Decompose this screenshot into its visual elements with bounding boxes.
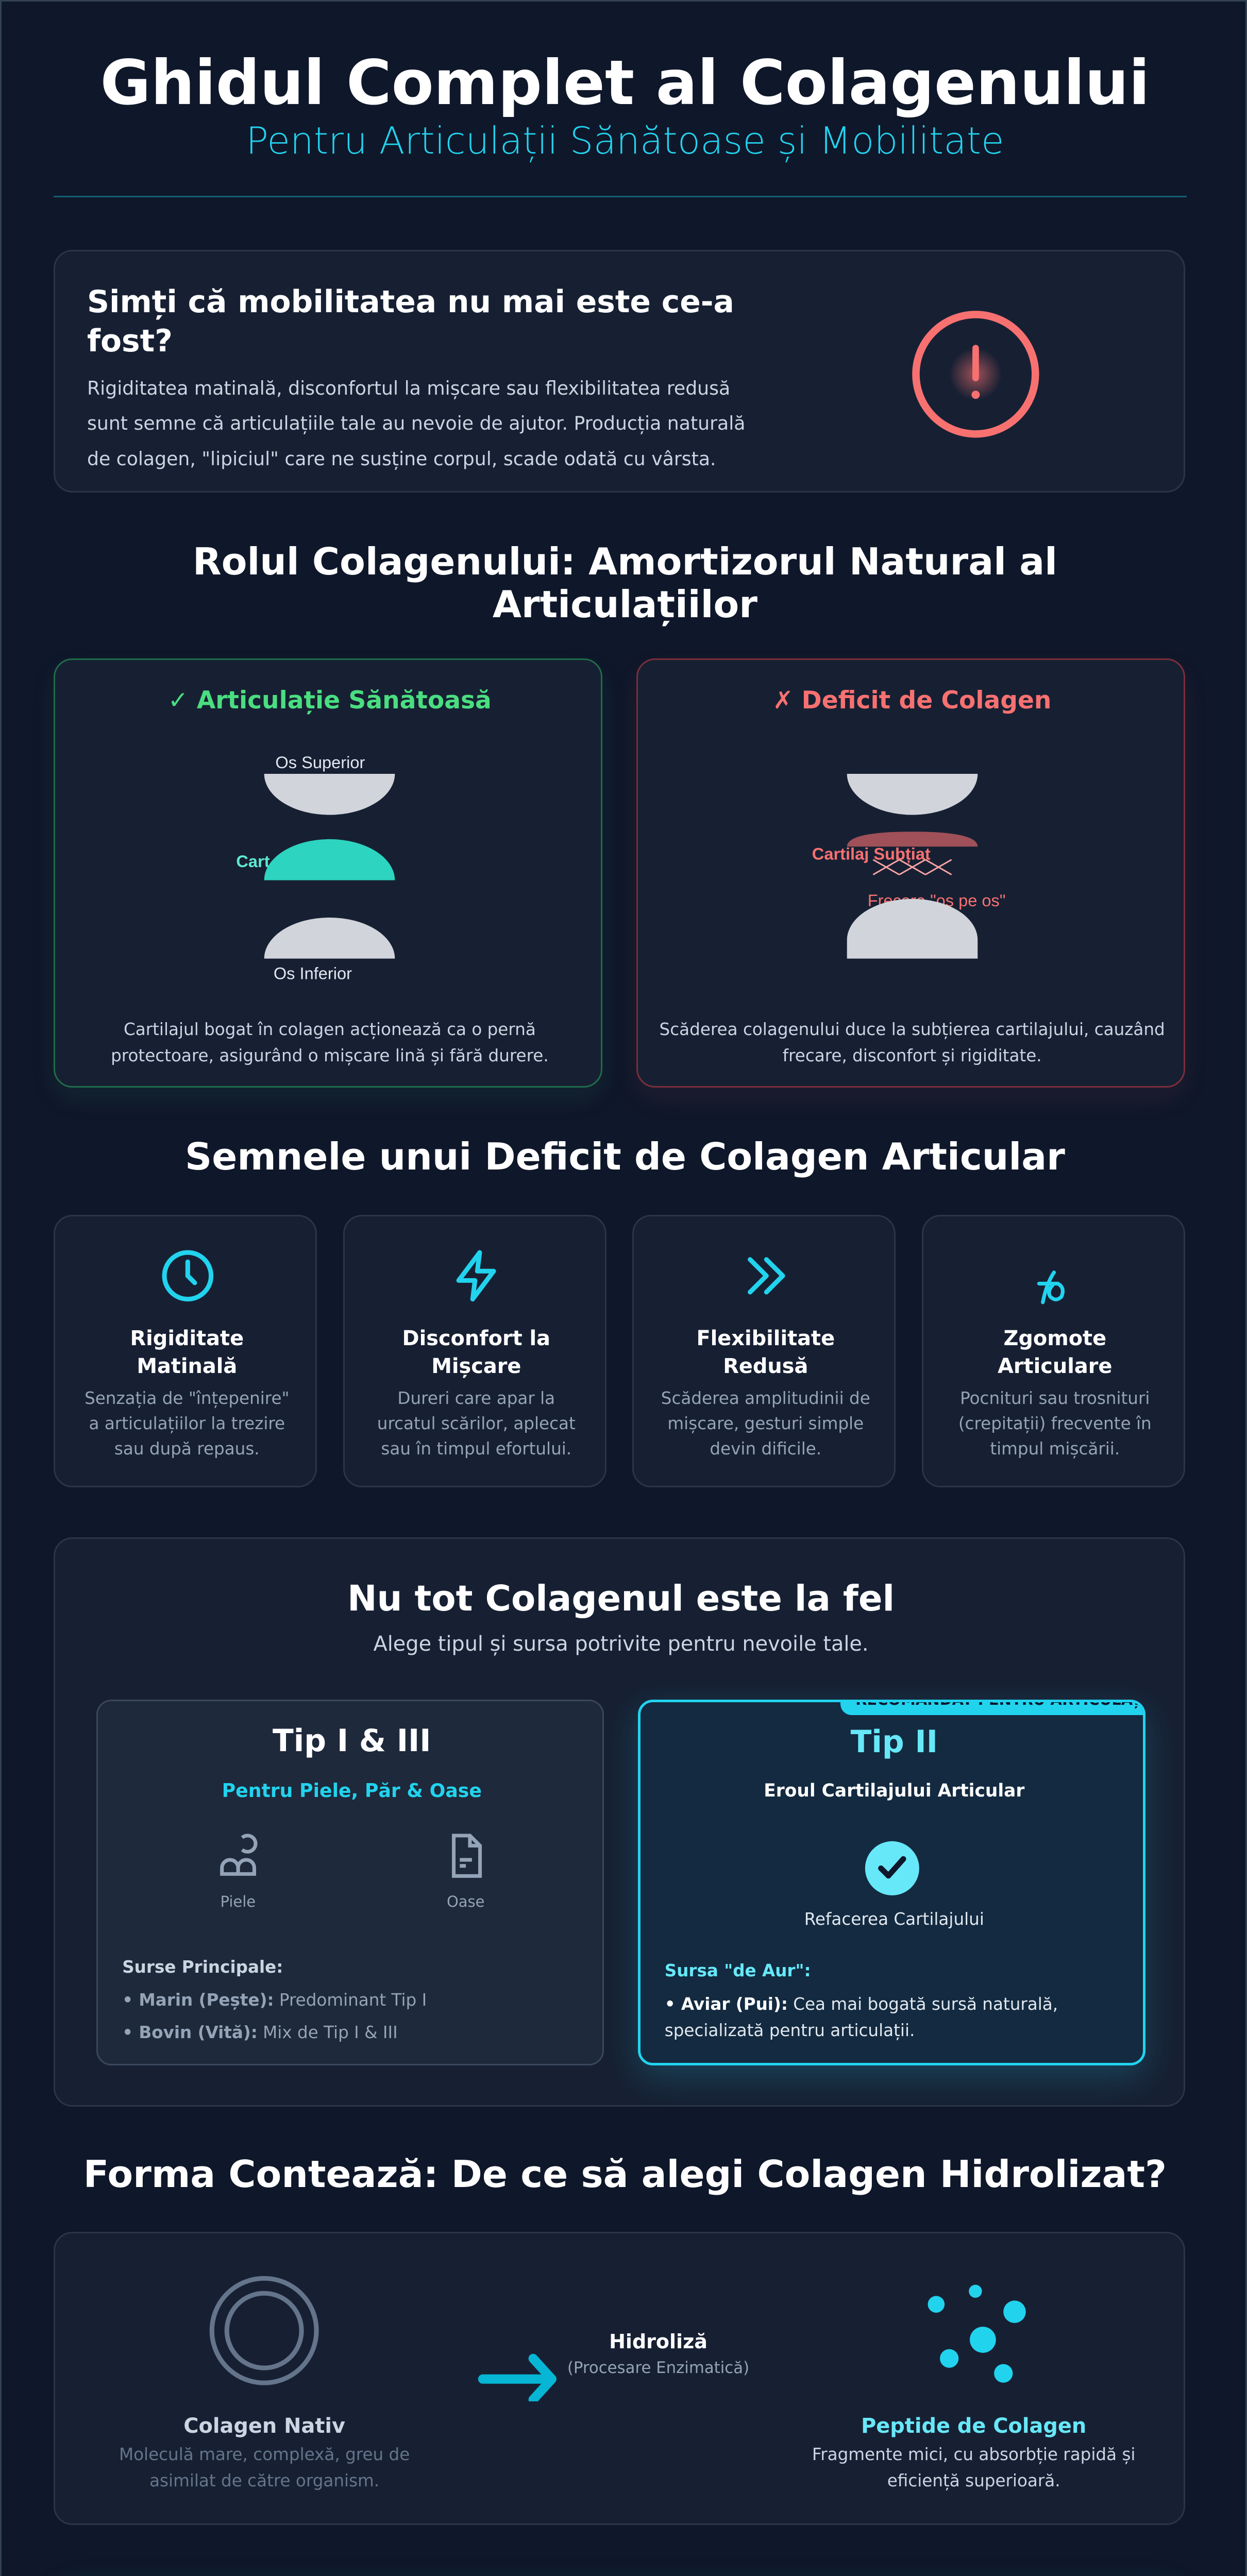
sign 3 text: Scăderea amplitudinii de mișcare, gesturi simple devin dificile. — [661, 1388, 870, 1459]
arrow — [478, 2353, 557, 2401]
peptide text: Fragmente mici, cu absorbție rapidă și eficiență superioară. — [812, 2445, 1135, 2490]
subtitle: Pentru Articulații Sănătoase și Mobilitate — [246, 120, 1004, 163]
healthy title: ✓ Articulație Sănătoasă — [168, 686, 492, 715]
diagram: healthy: Os Inferior — [274, 964, 352, 983]
types subtitle: Alege tipul și sursa potrivite pentru nevoile tale. — [373, 1632, 869, 1656]
healthy text: Cartilajul bogat în colagen acționează ca o pernă protectoare, asigurând o mișcare lină și fără durere. — [111, 1020, 549, 1065]
diagram: deficit: Cartilaj Subțiat — [812, 844, 931, 864]
diagram: healthy — [237, 753, 395, 983]
native text: Colagen Nativ — [183, 2414, 345, 2438]
icon: bolt — [457, 1250, 496, 1301]
icon: skin: Piele — [221, 1893, 256, 1910]
tip I sources: • Bovin (Vită): Mix de Tip I & III — [122, 2023, 398, 2042]
tip I sources: Surse Principale: — [122, 1957, 283, 1977]
diagram: deficit: Frecare "os pe os" — [867, 891, 1005, 910]
sign 4 text — [958, 1327, 1152, 1459]
icon: clock — [162, 1250, 213, 1301]
panel: hydrolysis — [54, 2232, 1185, 2525]
sign 4 text: Zgomote — [1003, 1327, 1106, 1350]
diagram: deficit — [812, 774, 1005, 959]
intro heading: Simți că mobilitatea nu mai este ce-a fost? — [87, 284, 734, 359]
panel: sign 4 — [922, 1215, 1185, 1487]
peptide text: Peptide de Colagen — [861, 2414, 1086, 2438]
icon: peptides — [928, 2284, 1026, 2383]
intro text: Rigiditatea matinală, disconfortul la mișcare sau flexibilitatea redusă sunt semne că articulațiile tale au nevoie de ajutor. Producția naturală de colagen, "lipiciul" care ne susține corpul, scade odată cu vârsta. — [87, 377, 745, 470]
panel: intro — [54, 250, 1185, 493]
panel: types — [54, 1537, 1185, 2107]
diagram: healthy: Cart — [237, 852, 270, 871]
icon: bone doc — [447, 1834, 484, 1910]
sign 1 text: Rigiditate — [130, 1327, 244, 1350]
sign 3 text — [661, 1327, 870, 1459]
tip II label: Refacerea Cartilajului — [804, 1909, 984, 1929]
hydrolysis label: (Procesare Enzimatică) — [567, 2359, 749, 2377]
sign 2 text: Mișcare — [431, 1354, 521, 1378]
card: tip I & III — [96, 1700, 604, 2065]
tip II source — [665, 1961, 1058, 2040]
badge — [840, 1702, 1143, 1715]
sign 4 text: Articulare — [998, 1354, 1112, 1378]
icon: chevrons — [748, 1257, 785, 1294]
icon: skin — [220, 1834, 258, 1910]
tip II source: • Aviar (Pui): Cea mai bogată sursă naturală, specializată pentru articulații. — [665, 1994, 1058, 2040]
native text — [119, 2414, 410, 2490]
deficit title: ✗ Deficit de Colagen — [773, 686, 1051, 715]
sign 1 text: Matinală — [137, 1354, 237, 1378]
heading: semnele: Semnele unui Deficit de Colagen Articular — [185, 1136, 1065, 1179]
panel: deficit — [636, 658, 1185, 1088]
panel: sign 3 — [632, 1215, 896, 1487]
panel: sign 1 — [54, 1215, 317, 1487]
icon: noise — [1037, 1270, 1065, 1304]
heading: rolul — [193, 540, 1057, 626]
sign 1 text — [85, 1327, 290, 1459]
tip I sources — [122, 1957, 427, 2042]
tip II source: Sursa "de Aur": — [665, 1961, 811, 1980]
hydrolysis label: Hidroliză — [609, 2330, 707, 2353]
peptide text — [812, 2414, 1135, 2490]
icon: alert — [912, 311, 1039, 438]
sign 2 text: Disconfort la — [402, 1327, 550, 1350]
hydrolysis label — [567, 2330, 749, 2377]
card: tip II — [638, 1700, 1145, 2065]
tip I title: Tip I & III — [273, 1723, 431, 1759]
sign 2 text: Dureri care apar la urcatul scărilor, aplecat sau în timpul efortului. — [377, 1388, 576, 1459]
tip II title: Tip II — [851, 1724, 938, 1760]
tip II subtitle: Eroul Cartilajului Articular — [764, 1781, 1024, 1801]
diagram: healthy: Os Superior — [276, 753, 365, 772]
title: Ghidul Complet al Colagenului — [100, 47, 1150, 119]
sign 3 text: Redusă — [723, 1354, 808, 1378]
deficit text: Scăderea colagenului duce la subțierea cartilajului, cauzând frecare, disconfort și rigiditate. — [660, 1020, 1165, 1065]
panel: sign 2 — [343, 1215, 606, 1487]
heading: rolul: Rolul Colagenului: Amortizorul Natural al — [193, 540, 1057, 584]
native text: Moleculă mare, complexă, greu de asimilat de către organism. — [119, 2445, 410, 2490]
tip I subtitle: Pentru Piele, Păr & Oase — [222, 1780, 482, 1802]
sign 2 text — [377, 1327, 576, 1459]
tip I sources: • Marin (Pește): Predominant Tip I — [122, 1990, 427, 2010]
types heading: Nu tot Colagenul este la fel — [347, 1578, 895, 1619]
sign 4 text: Pocnituri sau trosnituri (crepitații) frecvente în timpul mișcării. — [958, 1388, 1152, 1459]
heading: rolul: Articulațiilor — [493, 583, 757, 626]
icon: check — [865, 1841, 919, 1895]
icon: native molecule — [209, 2276, 319, 2385]
heading: forma: Forma Contează: De ce să alegi Colagen Hidrolizat? — [83, 2153, 1167, 2196]
icon: bone doc: Oase — [447, 1893, 484, 1910]
sign 3 text: Flexibilitate — [696, 1327, 835, 1350]
sign 1 text: Senzația de "înțepenire" a articulațiilor la trezire sau după repaus. — [85, 1388, 290, 1459]
panel: healthy joint — [54, 658, 602, 1088]
